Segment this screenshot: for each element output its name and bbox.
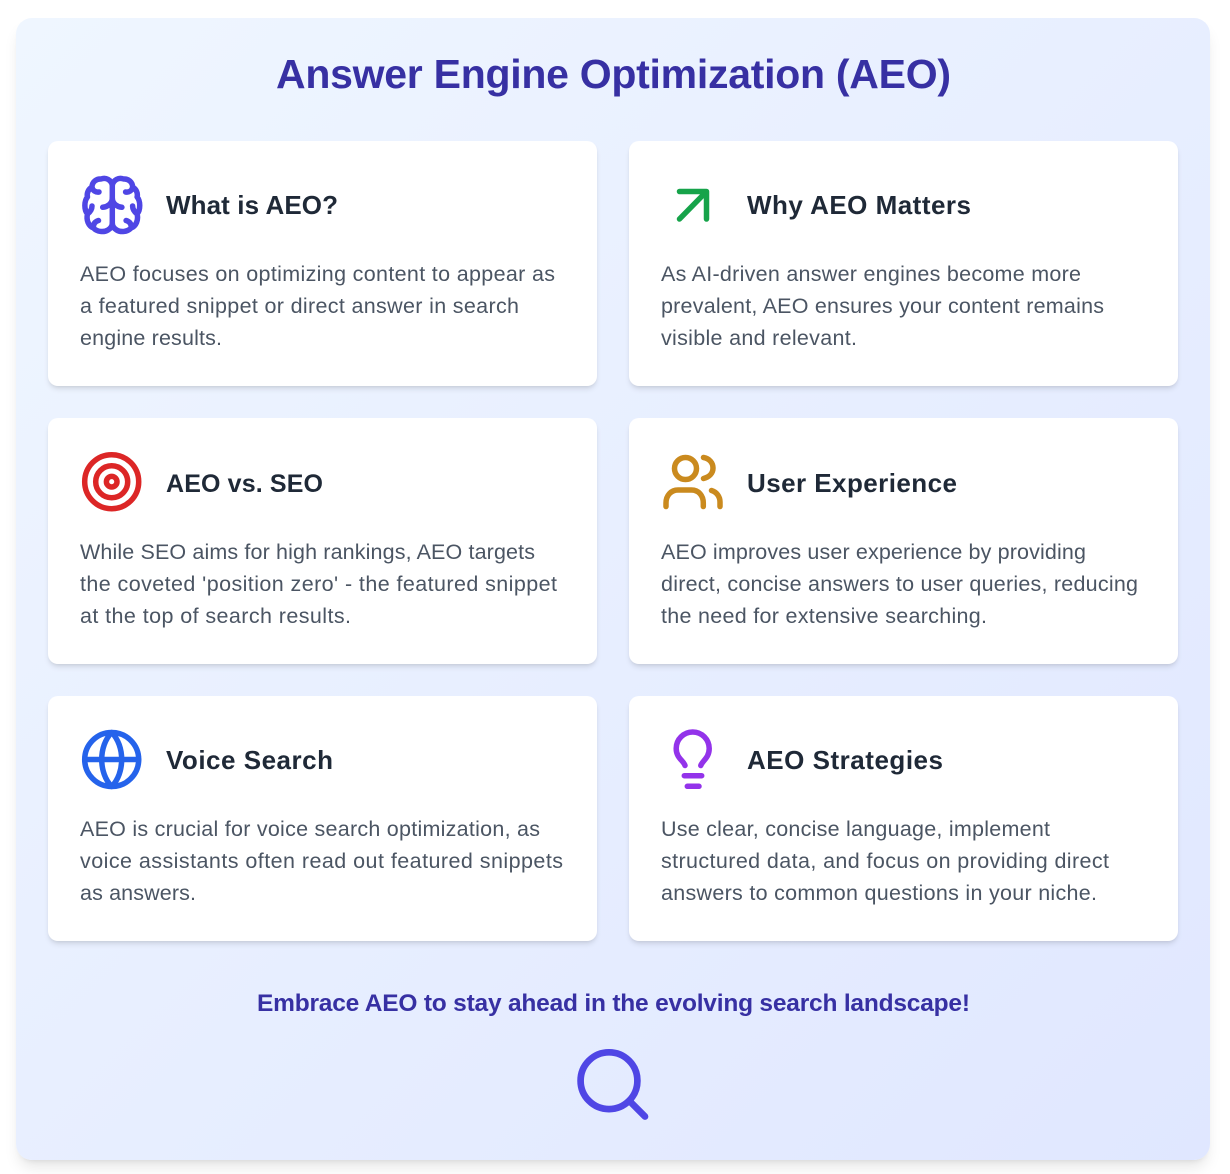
- panel: Voice Search: [48, 696, 597, 941]
- heading: Voice Search: [166, 745, 333, 775]
- icon: target: [85, 455, 139, 509]
- text block: [661, 817, 1109, 905]
- icon: users: [666, 458, 720, 506]
- panel: What is AEO?: [48, 141, 597, 386]
- icon: arrow up right: [680, 192, 706, 219]
- text block: as answers.: [80, 881, 196, 905]
- text block: [80, 817, 563, 905]
- panel: User Experience: [629, 418, 1178, 664]
- text block: engine results.: [80, 326, 222, 350]
- text block: AEO improves user experience by providing: [661, 540, 1086, 564]
- heading: What is AEO?: [166, 190, 338, 220]
- panel: AEO vs. SEO: [48, 418, 597, 664]
- title: Answer Engine Optimization (AEO): [276, 51, 951, 97]
- text block: [80, 262, 555, 350]
- text block: answers to common questions in your niche.: [661, 881, 1097, 905]
- icon: magnifying glass: [577, 1049, 648, 1120]
- text block: While SEO aims for high rankings, AEO targets: [80, 540, 535, 564]
- heading: User Experience: [747, 468, 957, 498]
- text block: the coveted 'position zero' - the featured snippet: [80, 572, 557, 596]
- heading: AEO vs. SEO: [166, 470, 323, 498]
- text block: Use clear, concise language, implement: [661, 817, 1050, 841]
- text block: [80, 540, 557, 628]
- text block: structured data, and focus on providing direct: [661, 849, 1109, 873]
- panel: Why AEO Matters: [629, 141, 1178, 386]
- text block: the need for extensive searching.: [661, 604, 987, 628]
- text block: AEO focuses on optimizing content to appear as: [80, 262, 555, 286]
- text block: AEO is crucial for voice search optimization, as: [80, 817, 540, 841]
- text block: As AI-driven answer engines become more: [661, 262, 1081, 286]
- callout: closing line: Embrace AEO to stay ahead in the evolving search landscape!: [257, 990, 970, 1017]
- text block: direct, concise answers to user queries, reducing: [661, 572, 1138, 596]
- text block: visible and relevant.: [661, 326, 857, 350]
- text block: [661, 540, 1138, 628]
- icon: light bulb: [676, 732, 709, 786]
- text block: prevalent, AEO ensures your content remains: [661, 294, 1104, 318]
- text block: [661, 262, 1104, 350]
- heading: Why AEO Matters: [747, 190, 971, 220]
- text block: at the top of search results.: [80, 604, 351, 628]
- text block: a featured snippet or direct answer in search: [80, 294, 519, 318]
- icon: brain: [85, 178, 140, 232]
- heading: AEO Strategies: [747, 745, 943, 775]
- text block: voice assistants often read out featured snippets: [80, 849, 563, 873]
- panel: AEO Strategies: [629, 696, 1178, 941]
- icon: globe: [85, 732, 139, 786]
